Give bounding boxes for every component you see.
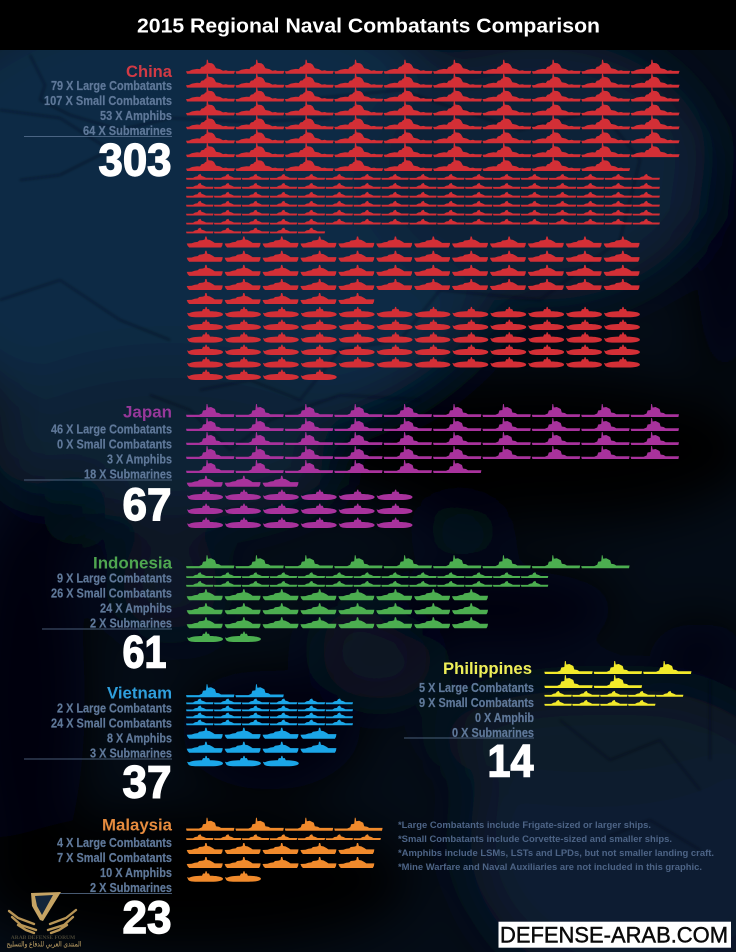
Vietnam total: 37 xyxy=(122,756,172,808)
Vietnam counts: 2 X Large Combatants xyxy=(57,701,172,715)
site name: DEFENSE-ARAB.COM xyxy=(500,922,728,948)
Vietnam counts: 3 X Submarines xyxy=(90,746,172,760)
China counts xyxy=(44,79,172,138)
Japan counts: 0 X Small Combatants xyxy=(57,438,172,452)
Vietnam fleet icons xyxy=(186,684,353,766)
Indonesia counts: 26 X Small Combatants xyxy=(51,586,172,600)
Philippines counts: 9 X Small Combatants xyxy=(419,696,534,710)
Japan counts: 18 X Submarines xyxy=(84,468,172,482)
icon: wings xyxy=(9,910,76,933)
Philippines counts: 5 X Large Combatants xyxy=(419,681,534,695)
forum name: ARAB DEFENSE FORUM xyxy=(11,935,76,941)
Malaysia fleet icons xyxy=(186,818,383,882)
Vietnam counts: 24 X Small Combatants xyxy=(51,716,172,730)
Malaysia name: Malaysia xyxy=(102,817,173,835)
Malaysia total: 23 xyxy=(122,892,172,943)
China counts: 79 X Large Combatants xyxy=(51,79,172,93)
icon: shield xyxy=(31,892,61,921)
Vietnam counts: 8 X Amphibs xyxy=(107,731,172,745)
Indonesia total: 61 xyxy=(122,626,166,678)
Philippines total: 14 xyxy=(488,736,534,786)
panel: China xyxy=(24,60,680,380)
watermark logo xyxy=(6,892,82,948)
Philippines counts: 0 X Amphib xyxy=(475,711,534,725)
footnotes: *Mine Warfare and Naval Auxiliaries are not included in this graphic. xyxy=(398,862,702,873)
title band xyxy=(0,0,736,50)
Indonesia fleet icons xyxy=(186,555,630,642)
footnotes: *Amphibs include LSMs, LSTs and LPDs, but not smaller landing craft. xyxy=(398,848,714,859)
Japan counts: 46 X Large Combatants xyxy=(51,423,172,437)
Vietnam counts xyxy=(51,701,172,760)
China name: China xyxy=(126,63,173,81)
panel: Vietnam xyxy=(24,684,353,808)
Japan counts: 3 X Amphibs xyxy=(107,453,172,467)
Indonesia counts xyxy=(51,571,172,630)
panel: Indonesia xyxy=(42,554,630,678)
Indonesia counts: 24 X Amphibs xyxy=(100,601,172,615)
Indonesia counts: 9 X Large Combatants xyxy=(57,571,172,585)
Japan name: Japan xyxy=(123,404,172,422)
China fleet icons xyxy=(186,60,680,380)
Malaysia counts xyxy=(57,836,172,895)
Philippines counts: 0 X Submarines xyxy=(452,726,534,740)
China total: 303 xyxy=(98,134,172,186)
Philippines counts xyxy=(419,681,534,740)
Indonesia name: Indonesia xyxy=(93,554,173,572)
title: 2015 Regional Naval Combatants Comparison xyxy=(137,16,600,38)
panel: Philippines xyxy=(404,660,692,786)
watermark banner xyxy=(498,922,731,948)
panel: Japan xyxy=(24,404,679,530)
Japan total: 67 xyxy=(122,479,172,530)
Malaysia counts: 7 X Small Combatants xyxy=(57,851,172,865)
Philippines fleet icons xyxy=(544,661,692,706)
China counts: 64 X Submarines xyxy=(83,124,172,138)
Indonesia counts: 2 X Submarines xyxy=(90,616,172,630)
footnotes: *Large Combatants include Frigate-sized or larger ships. xyxy=(398,820,651,831)
China counts: 53 X Amphibs xyxy=(100,109,172,123)
Malaysia counts: 10 X Amphibs xyxy=(100,866,172,880)
panel: Malaysia xyxy=(57,817,383,943)
Vietnam name: Vietnam xyxy=(107,684,172,702)
Malaysia counts: 2 X Submarines xyxy=(90,881,172,895)
Japan counts xyxy=(51,423,172,482)
Philippines name: Philippines xyxy=(443,660,532,678)
footnotes: *Small Combatants include Corvette-sized and smaller ships. xyxy=(398,834,672,845)
China counts: 107 X Small Combatants xyxy=(44,94,172,108)
Malaysia counts: 4 X Large Combatants xyxy=(57,836,172,850)
Japan fleet icons xyxy=(186,404,679,528)
footnotes xyxy=(398,820,714,873)
forum name arabic: المنتدى العربي للدفاع والتسليح xyxy=(6,940,82,948)
